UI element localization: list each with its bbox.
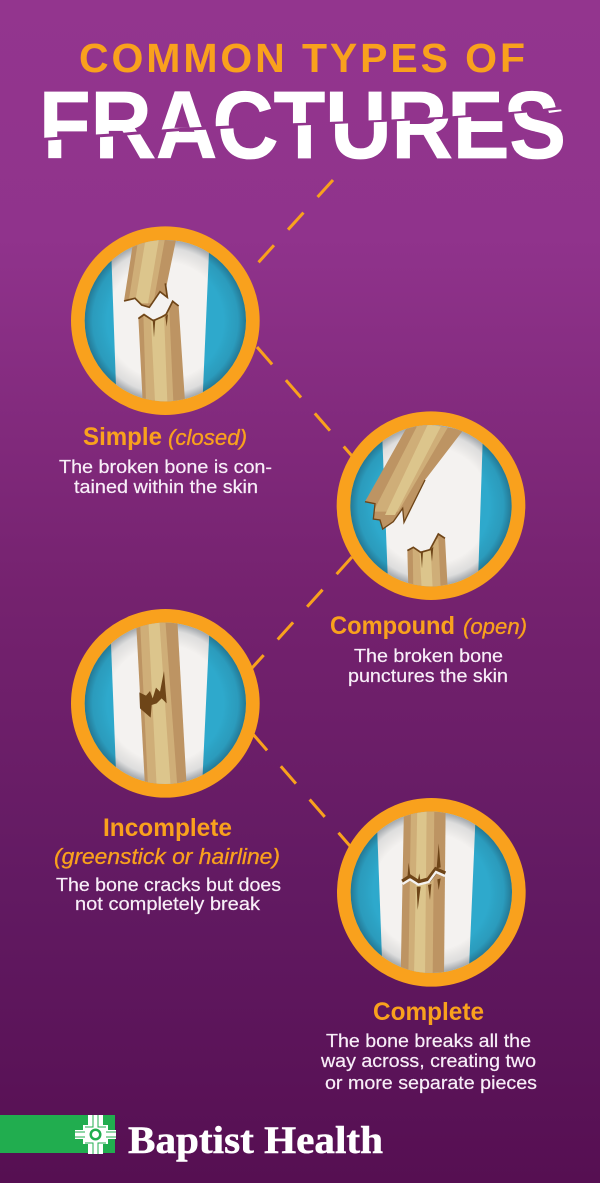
label: simple: Simple xyxy=(83,423,162,451)
label: incomplete: (greenstick or hairline) xyxy=(54,844,280,869)
description: complete: way across, creating two xyxy=(320,1051,536,1071)
panel: complete fracture illustration xyxy=(337,798,526,987)
icon: crack xyxy=(139,671,167,718)
green band xyxy=(0,1115,115,1153)
label: incomplete xyxy=(54,814,281,914)
icon: fully broken bone xyxy=(400,812,446,973)
icon: break line xyxy=(403,843,445,910)
panel: simple fracture illustration xyxy=(71,226,260,415)
title line: fractures, broken upper half: FRACTURES xyxy=(39,74,560,174)
description: complete xyxy=(320,1031,537,1093)
description: simple: tained within the skin xyxy=(74,477,258,497)
description: incomplete: The bone cracks but does xyxy=(56,875,281,895)
icon: upper bone fragment xyxy=(124,240,176,306)
description: complete: or more separate pieces xyxy=(325,1073,537,1093)
label: compound xyxy=(330,612,527,686)
label: complete: Complete xyxy=(373,998,484,1026)
description: simple: The broken bone is con- xyxy=(59,457,272,477)
icon: lower bone fragment xyxy=(138,300,185,402)
icon: lower bone fragment xyxy=(407,535,448,586)
panel: compound fracture illustration xyxy=(337,411,525,600)
description: compound: punctures the skin xyxy=(348,666,508,686)
dashed connector lines xyxy=(252,180,352,846)
footer logo xyxy=(0,1115,383,1162)
label: compound: (open) xyxy=(463,614,527,639)
title line: common types of: COMMON TYPES OF xyxy=(79,35,525,81)
wordmark: Baptist Health xyxy=(128,1119,383,1162)
icon: upper bone fragment displaced xyxy=(365,425,462,528)
label: complete xyxy=(320,998,537,1093)
panel: incomplete fracture illustration xyxy=(71,609,260,798)
description: complete: The bone breaks all the xyxy=(326,1031,531,1051)
title xyxy=(44,44,563,160)
description: incomplete xyxy=(56,875,281,914)
description: simple xyxy=(59,457,272,497)
label: simple xyxy=(59,423,272,497)
description: compound xyxy=(348,646,508,686)
description: compound: The broken bone xyxy=(354,646,503,666)
label: compound: Compound xyxy=(330,612,455,640)
label: simple: (closed) xyxy=(168,425,247,450)
label: incomplete: Incomplete xyxy=(103,814,232,842)
icon: cracked bone xyxy=(136,622,186,784)
description: incomplete: not completely break xyxy=(75,894,261,914)
title line: fractures, broken lower half: FRACTURES xyxy=(43,78,566,178)
icon: baptist health cross xyxy=(75,1115,116,1154)
